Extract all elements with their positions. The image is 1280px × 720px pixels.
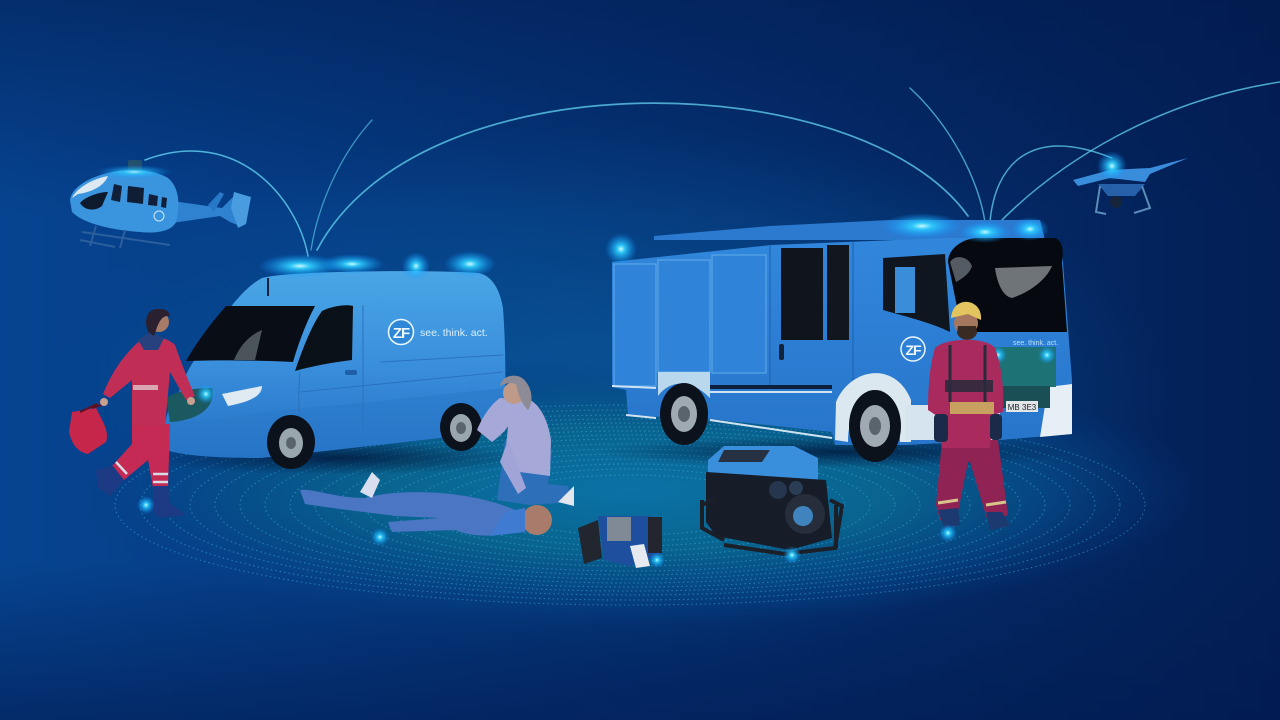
portable monitor device <box>578 516 662 568</box>
signal arcs <box>145 82 1280 256</box>
windscreen <box>948 238 1067 332</box>
collar <box>138 332 164 350</box>
drone <box>1073 151 1188 214</box>
van grille <box>166 388 213 422</box>
kneeling woman on phone <box>477 376 574 506</box>
cab grille <box>988 347 1056 387</box>
front wheel arch <box>835 373 911 442</box>
plate <box>1006 401 1038 412</box>
van headlight <box>222 386 262 406</box>
ground sensor glows <box>137 496 957 568</box>
fire truck: see. think. act. <box>1013 340 1058 347</box>
slogan: see. think. act. <box>420 327 488 339</box>
van door lines <box>299 305 503 436</box>
van antenna <box>267 278 269 296</box>
emergency van: ZF <box>393 325 410 342</box>
crew cab doors <box>781 248 823 340</box>
fire truck: ZF <box>905 342 922 358</box>
jacket <box>103 338 195 426</box>
van roof lights <box>258 251 496 280</box>
emergency van <box>140 251 530 475</box>
red bag <box>69 408 107 454</box>
fire truck <box>600 213 1080 468</box>
firefighter <box>928 302 1010 530</box>
van lower shade <box>166 388 505 458</box>
lying casualty <box>300 472 552 536</box>
rear roller shutters <box>614 255 766 386</box>
van windshield <box>186 306 315 362</box>
fire truck: MB 3E3 <box>1008 403 1037 412</box>
logo: ZF <box>388 320 414 344</box>
helicopter <box>70 160 251 248</box>
paramedic walking with bag <box>69 309 195 518</box>
portable pump <box>702 446 842 554</box>
cab bumper <box>905 405 1000 440</box>
ankle reflective stripes <box>938 500 1006 505</box>
roof rack <box>654 220 1045 240</box>
floor with concentric signal rings <box>60 355 1200 625</box>
truck roof lights <box>605 213 1049 265</box>
head <box>149 312 169 332</box>
van door handle <box>345 370 357 375</box>
van side window <box>295 305 353 371</box>
truck logo: ZF <box>901 337 925 361</box>
reflective leg stripes <box>116 462 168 482</box>
cab side window <box>883 254 950 332</box>
truck silhouette <box>612 238 1072 445</box>
legs <box>112 424 170 488</box>
van wheels <box>267 415 315 469</box>
truck wheels <box>660 383 708 445</box>
door handle <box>779 344 784 360</box>
van body <box>164 271 505 458</box>
lower trim <box>710 385 832 389</box>
